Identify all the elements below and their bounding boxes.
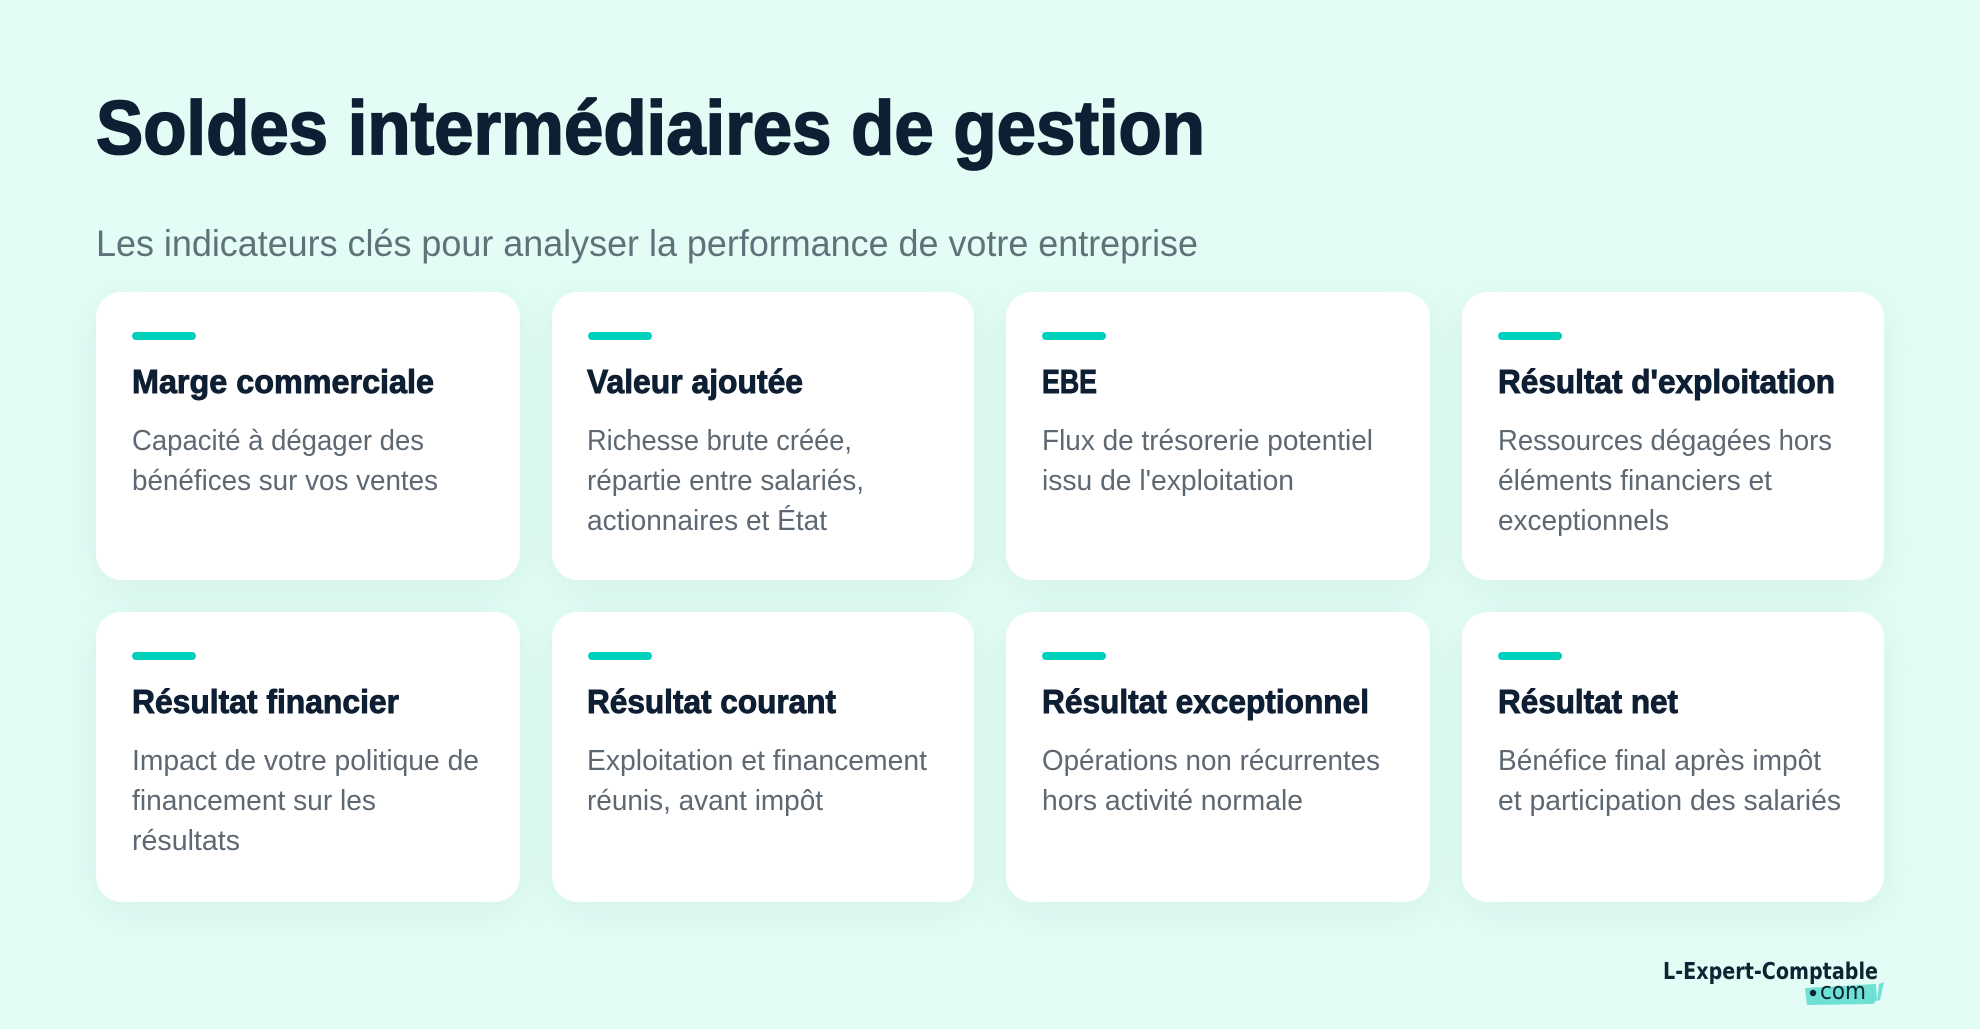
panel: EBE (1006, 292, 1430, 580)
panel: Valeur ajoutée: actionnaires et État (587, 504, 827, 537)
panel: Valeur ajoutée: Valeur ajoutée (587, 363, 803, 400)
panel: EBE: Flux de trésorerie potentiel (1042, 425, 1373, 457)
panel: Résultat net: et participation des salariés (1498, 785, 1841, 817)
panel: Marge commerciale: Capacité à dégager des (132, 425, 424, 457)
panel: Valeur ajoutée: répartie entre salariés, (587, 465, 864, 497)
panel: Résultat courant: Exploitation et financement (587, 745, 927, 777)
panel: Résultat courant: Résultat courant (587, 683, 836, 720)
panel: Marge commerciale (96, 292, 520, 580)
panel: Résultat d'exploitation: Résultat d'exploitation (1498, 363, 1835, 400)
panel: Résultat d'exploitation: éléments financiers et (1498, 465, 1772, 497)
panel: Valeur ajoutée (552, 292, 974, 580)
panel: Résultat financier: résultats (132, 825, 240, 857)
panel: Résultat exceptionnel (1006, 612, 1430, 902)
panel: Marge commerciale: bénéfices sur vos ventes (132, 465, 438, 497)
panel: Résultat financier (96, 612, 520, 902)
panel: Marge commerciale: Marge commerciale (132, 363, 434, 400)
panel: Résultat exceptionnel: hors activité normale (1042, 785, 1303, 817)
panel: EBE: issu de l'exploitation (1042, 465, 1294, 497)
panel: Résultat financier: Résultat financier (132, 683, 399, 720)
subtitle: Les indicateurs clés pour analyser la performance de votre entreprise (96, 223, 1198, 264)
logo: L-Expert-Comptable.com (1663, 959, 1884, 1005)
panel: Résultat net: Bénéfice final après impôt (1498, 745, 1821, 777)
panel: Résultat d'exploitation: Ressources dégagées hors (1498, 425, 1832, 457)
panel: Résultat courant (552, 612, 974, 902)
panel: Résultat net (1462, 612, 1884, 902)
panel: Résultat d'exploitation (1462, 292, 1884, 580)
panel: Résultat financier: Impact de votre politique de (132, 745, 479, 777)
panel: Résultat net: Résultat net (1498, 683, 1678, 720)
panel: Résultat exceptionnel: Opérations non récurrentes (1042, 745, 1380, 777)
panel: Résultat exceptionnel: Résultat exceptionnel (1042, 683, 1369, 720)
panel: Résultat d'exploitation: exceptionnels (1498, 505, 1669, 537)
panel: Résultat courant: réunis, avant impôt (587, 785, 823, 817)
logo: L-Expert-Comptable.com: com (1820, 977, 1866, 1005)
title: Soldes intermédiaires de gestion (96, 86, 1205, 171)
logo: L-Expert-Comptable.com: L-Expert-Comptable (1663, 959, 1878, 985)
panel: Résultat financier: financement sur les (132, 785, 376, 817)
panel: EBE: EBE (1042, 363, 1097, 400)
panel: Valeur ajoutée: Richesse brute créée, (587, 425, 852, 457)
